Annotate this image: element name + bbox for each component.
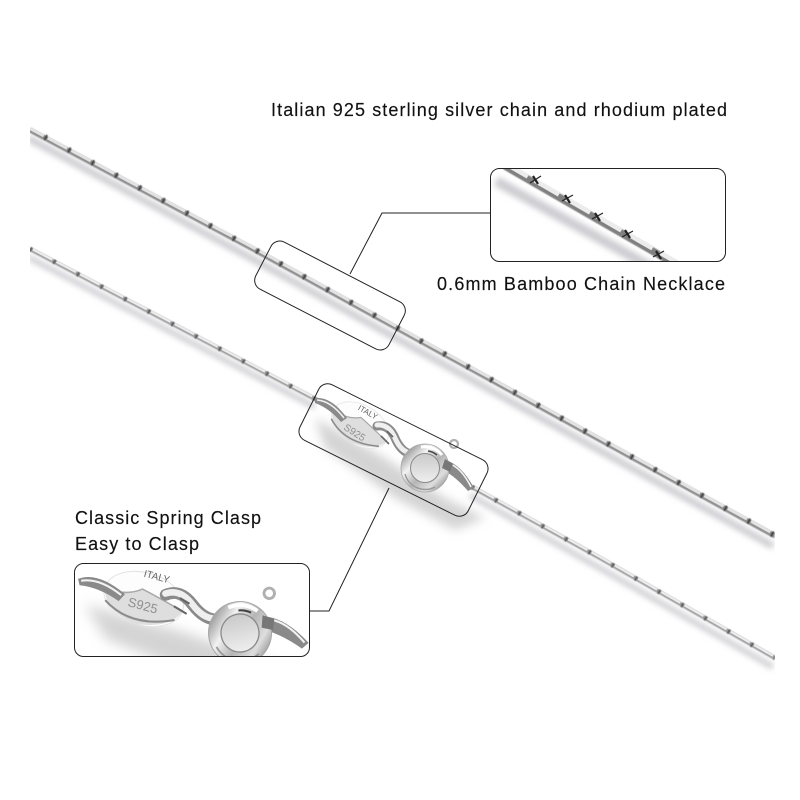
label line: Easy to Clasp: Easy to Clasp bbox=[75, 534, 199, 554]
heading: material: Italian 925 sterling silver chain and rhodium plated bbox=[271, 100, 727, 120]
label: product name: 0.6mm Bamboo Chain Necklace bbox=[437, 274, 725, 294]
label: clasp description bbox=[75, 508, 261, 554]
inset engraving: S925: S925 bbox=[126, 594, 159, 617]
callout frame: clasp selection bbox=[296, 380, 491, 520]
clasp engraving: S925: S925 bbox=[341, 422, 367, 444]
inset engraving: ITALY: ITALY bbox=[142, 569, 171, 586]
inset panel: chain close-up bbox=[490, 168, 726, 262]
chain: upper strand bbox=[28, 128, 775, 546]
callout connector: clasp bbox=[309, 488, 389, 611]
label line: Classic Spring Clasp: Classic Spring Clasp bbox=[75, 508, 261, 528]
callout frame: chain detail selection bbox=[251, 238, 409, 353]
clasp photo bbox=[315, 392, 485, 530]
chain: lower strand bbox=[28, 248, 775, 667]
inset panel: clasp close-up bbox=[74, 563, 310, 657]
callout connector: chain bbox=[350, 213, 490, 274]
clasp engraving: ITALY: ITALY bbox=[356, 403, 380, 422]
